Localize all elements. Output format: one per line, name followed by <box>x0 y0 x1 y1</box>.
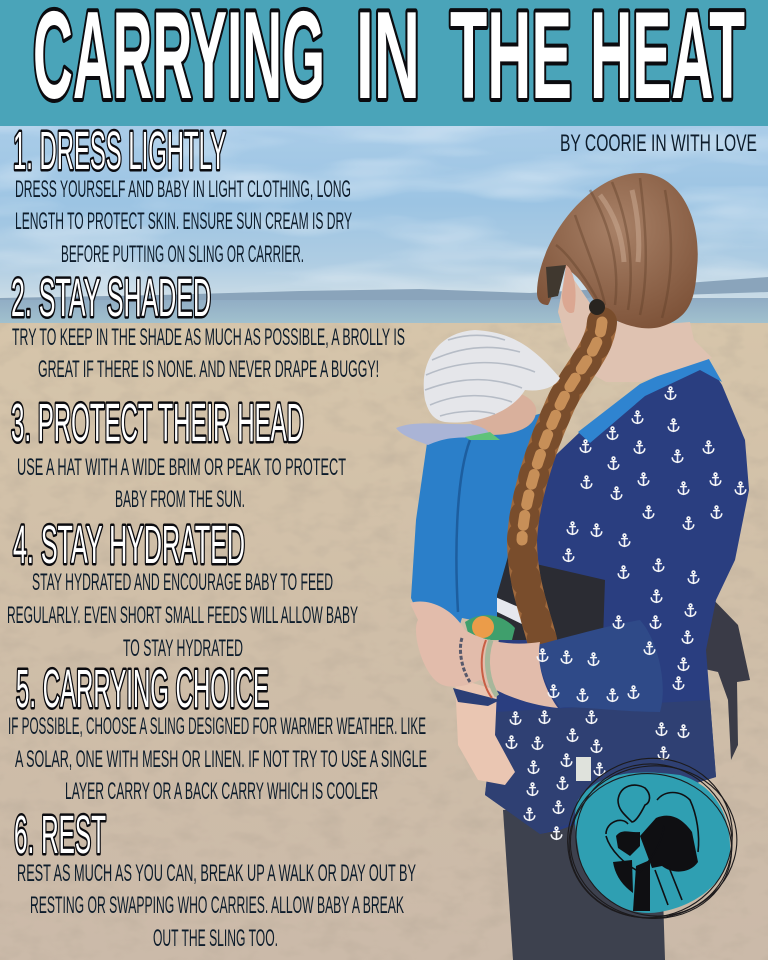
hair <box>537 173 698 328</box>
section 5: carrying choice <box>8 659 427 805</box>
body 1 <box>15 176 352 268</box>
section 2: stay shaded: 2. STAY SHADED <box>11 268 211 328</box>
sun hat <box>424 330 560 423</box>
body 2 <box>12 324 405 383</box>
neck <box>558 268 712 382</box>
sleeve <box>537 620 663 712</box>
title band <box>0 0 768 126</box>
sunglasses and ear <box>546 265 566 298</box>
section 2: stay shaded <box>11 268 405 383</box>
tattoo and bracelets <box>460 638 497 698</box>
section 6: rest: 6. REST <box>14 805 106 865</box>
body 4: STAY HYDRATED AND ENCOURAGE BABY TO FEED <box>32 569 333 596</box>
trousers <box>503 800 665 960</box>
body 2: TRY TO KEEP IN THE SHADE AS MUCH AS POSSIBLE, A BROLLY IS <box>12 324 405 351</box>
anchor print <box>506 387 746 839</box>
baby collar <box>396 423 489 445</box>
infographic: REGULARLY. EVEN SHORT SMALL FEEDS WILL ALLOW BABY <box>7 602 358 629</box>
body 1: LENGTH TO PROTECT SKIN. ENSURE SUN CREAM IS DRY <box>15 208 352 235</box>
arm and hand <box>410 601 558 708</box>
section 4: stay hydrated <box>7 515 358 662</box>
section 3: protect their head <box>11 393 346 513</box>
section 1: dress lightly: 1. DRESS LIGHTLY <box>13 121 226 181</box>
body 6: RESTING OR SWAPPING WHO CARRIES. ALLOW BABY A BREAK <box>30 892 404 919</box>
section 4: stay hydrated: 4. STAY HYDRATED <box>13 515 245 575</box>
tiger toy <box>465 615 515 640</box>
body 6: REST AS MUCH AS YOU CAN, BREAK UP A WALK OR DAY OUT BY <box>17 860 416 887</box>
section 3: protect their head: 3. PROTECT THEIR HEAD <box>11 393 304 453</box>
logo: Coorie In With Love badge <box>542 732 760 944</box>
baby head <box>467 390 536 435</box>
body 3 <box>17 454 346 513</box>
body 1: BEFORE PUTTING ON SLING OR CARRIER. <box>61 241 304 268</box>
shoulder strap <box>578 354 722 443</box>
back carrier strap <box>700 592 750 760</box>
carrier body <box>411 412 546 640</box>
top <box>485 360 749 834</box>
braid <box>522 322 602 640</box>
illustration: mother carrying baby <box>396 173 750 960</box>
baby leg <box>455 678 515 785</box>
body 3: BABY FROM THE SUN. <box>115 486 245 513</box>
body 3: USE A HAT WITH A WIDE BRIM OR PEAK TO PROTECT <box>17 454 346 481</box>
section 6: rest <box>14 805 416 952</box>
section 5: carrying choice: 5. CARRYING CHOICE <box>16 659 269 719</box>
body 2: GREAT IF THERE IS NONE. AND NEVER DRAPE A BUGGY! <box>38 356 379 383</box>
body 4: TO STAY HYDRATED <box>123 635 243 662</box>
section 1: dress lightly <box>13 121 352 268</box>
body 1: DRESS YOURSELF AND BABY IN LIGHT CLOTHING, LONG <box>15 176 351 203</box>
body 5 <box>8 713 427 805</box>
dark carrier panel <box>497 555 605 640</box>
logo silhouette <box>606 785 699 911</box>
body 4 <box>7 569 358 662</box>
body 6 <box>17 860 416 952</box>
body 6: OUT THE SLING TOO. <box>153 925 278 952</box>
body 5: LAYER CARRY OR A BACK CARRY WHICH IS COOLER <box>65 778 378 805</box>
